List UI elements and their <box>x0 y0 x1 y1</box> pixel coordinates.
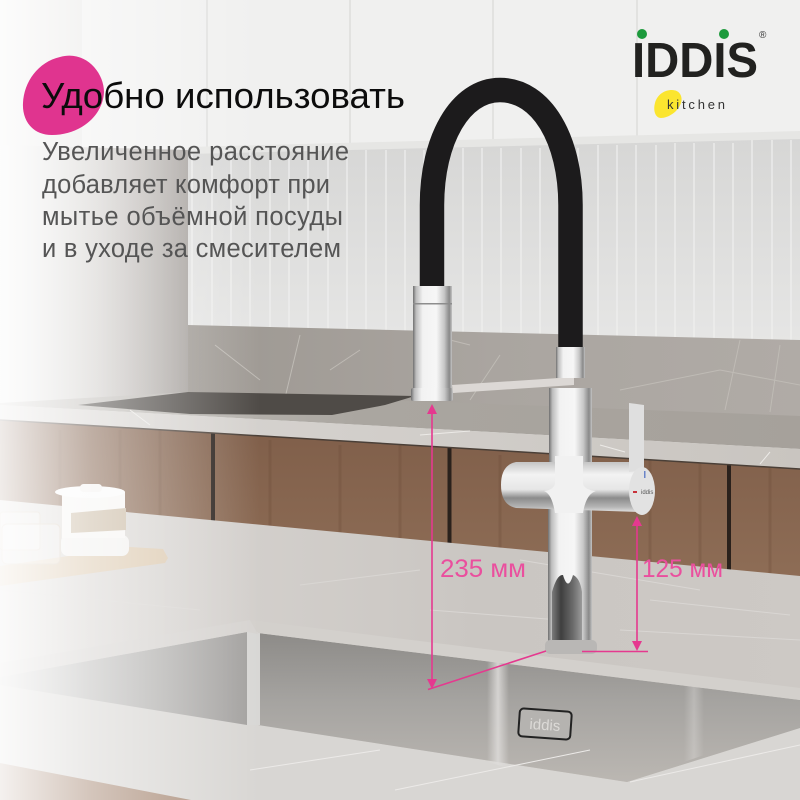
kitchen label: kitchen <box>667 97 725 112</box>
handle end cap with hot and cold marks <box>629 467 655 515</box>
dimension 235 mm <box>427 404 546 690</box>
tray with teapot and glasses <box>0 484 168 586</box>
label 125 mm: 125 мм <box>642 555 723 583</box>
registered mark: ® <box>759 30 767 41</box>
back counter surface <box>0 392 800 449</box>
upper wall cabinets <box>82 0 800 150</box>
swivel arm <box>452 377 574 393</box>
sink back wall <box>258 633 800 782</box>
lower wood strip <box>0 763 191 800</box>
sink badge: iddis <box>529 716 561 735</box>
lower faucet column <box>548 505 592 645</box>
upper faucet body <box>549 388 592 473</box>
pink blob behind title <box>23 56 104 135</box>
body text: Увеличенное расстояние <box>42 138 349 166</box>
handle end cap with hot and cold marks: iddis <box>641 490 653 496</box>
logo: IDDIS kitchen <box>632 29 767 118</box>
lever handle <box>629 403 644 472</box>
marble backsplash <box>188 325 800 420</box>
label 235 mm: 235 мм <box>440 555 526 583</box>
lower counter slab <box>0 685 800 800</box>
sink left wall <box>0 632 247 725</box>
slatted wall panel <box>188 134 800 345</box>
left wall in shadow <box>0 145 188 405</box>
induction hob <box>78 392 415 415</box>
pull-out spray head <box>411 286 453 401</box>
sink <box>0 632 800 800</box>
yellow blob <box>654 90 682 118</box>
horizontal cross body <box>501 456 640 513</box>
dimension 125 mm <box>582 516 723 652</box>
sink rim left <box>0 620 258 677</box>
sink badge <box>518 708 572 740</box>
wood cabinet fronts <box>0 420 800 580</box>
body text <box>42 138 349 263</box>
white wash on left side <box>0 0 260 800</box>
sink rim right <box>250 620 800 700</box>
tray <box>0 547 168 586</box>
wordmark: IDDIS <box>632 34 758 88</box>
shelf under cabinets <box>188 131 800 154</box>
green dots <box>637 29 647 39</box>
sink corner seams <box>247 632 260 725</box>
black flexible hose <box>432 90 570 350</box>
title: Удобно использовать <box>41 75 405 116</box>
glasses <box>0 512 60 564</box>
body text: мытье объёмной посуды <box>42 203 343 231</box>
faucet <box>411 90 655 654</box>
body text: и в уходе за смесителем <box>42 235 341 263</box>
teapot <box>55 484 129 556</box>
hose collar <box>556 347 585 378</box>
counter front lip <box>0 405 800 469</box>
body text: добавляет комфорт при <box>42 171 330 199</box>
front marble countertop <box>0 500 800 800</box>
faucet base <box>545 640 597 654</box>
